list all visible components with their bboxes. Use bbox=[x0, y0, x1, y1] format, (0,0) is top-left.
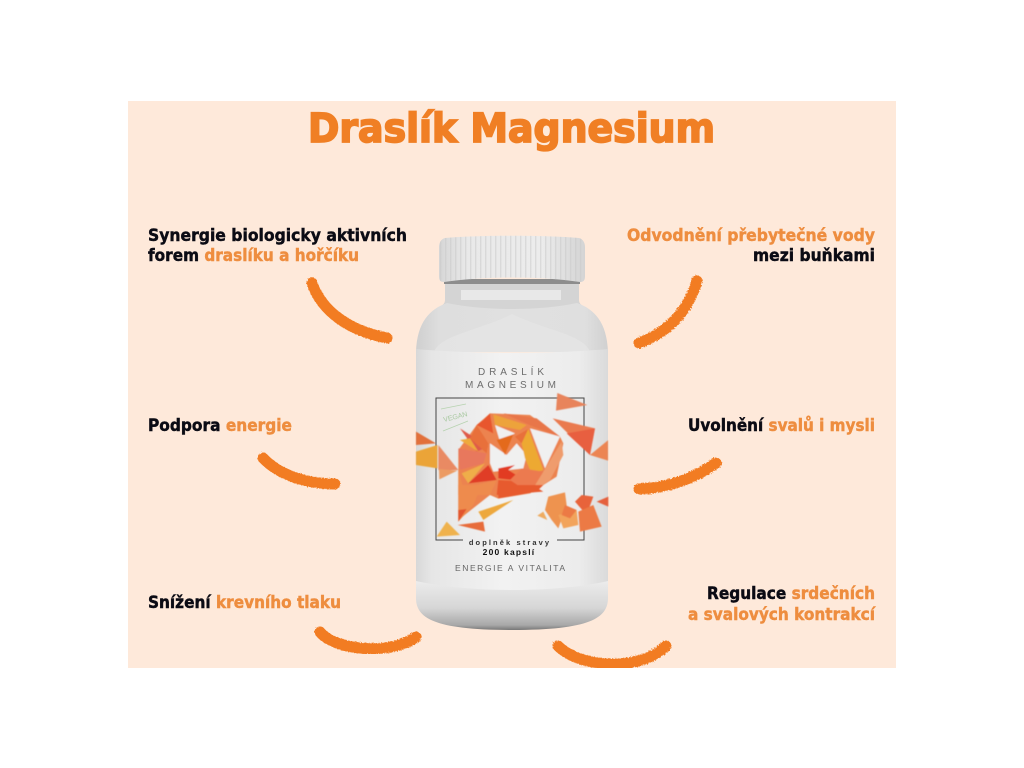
label name: DRASLÍK bbox=[478, 365, 544, 378]
bottle base bbox=[416, 581, 608, 630]
bottle cap bbox=[439, 236, 585, 282]
benefit: muscle and mind relaxation: Uvolnění svalů i mysli bbox=[688, 416, 875, 435]
benefit: synergy of active forms bbox=[148, 226, 407, 265]
large P letter facets bbox=[458, 413, 563, 495]
lower fragments and small M letter bbox=[437, 485, 608, 537]
title: Draslík Magnesium bbox=[308, 106, 715, 152]
benefit: water drainage: Odvodnění přebytečné vody bbox=[627, 226, 875, 245]
vitamin stamp bbox=[441, 404, 468, 431]
label name: MAGNESIUM bbox=[465, 380, 556, 391]
benefit: energy support: Podpora energie bbox=[148, 416, 292, 435]
benefit: lower blood pressure: Snížení krevního tlaku bbox=[148, 593, 341, 612]
benefit: water drainage: mezi buňkami bbox=[753, 246, 875, 265]
brush strokes bbox=[263, 281, 716, 664]
benefit: synergy of active forms: forem draslíku a hořčíku bbox=[148, 246, 359, 265]
low-poly logo artwork bbox=[416, 393, 608, 537]
benefit: heart and muscle contractions: a svalových kontrakcí bbox=[688, 605, 876, 624]
benefit: water drainage bbox=[627, 226, 875, 265]
label frame bbox=[436, 398, 584, 540]
large P letter base bbox=[458, 413, 563, 520]
label name bbox=[465, 365, 556, 391]
label: capsule count: 200 kapslí bbox=[483, 547, 535, 557]
bottle bbox=[416, 236, 608, 630]
bottle shoulder bbox=[416, 303, 608, 352]
bottle body bbox=[416, 349, 608, 592]
side and top fragments bbox=[416, 393, 608, 479]
panel: peach background bbox=[128, 101, 896, 668]
label: supplement text: doplněk stravy bbox=[469, 538, 551, 547]
bottle neck bbox=[434, 282, 590, 310]
benefit: heart and muscle contractions: Regulace srdečních bbox=[707, 584, 875, 603]
label: energy and vitality: ENERGIE A VITALITA bbox=[455, 563, 565, 573]
benefit: synergy of active forms: Synergie biologicky aktivních bbox=[148, 226, 407, 245]
vitamin stamp: VEGAN bbox=[443, 411, 468, 424]
benefit: heart and muscle contractions bbox=[688, 584, 876, 624]
